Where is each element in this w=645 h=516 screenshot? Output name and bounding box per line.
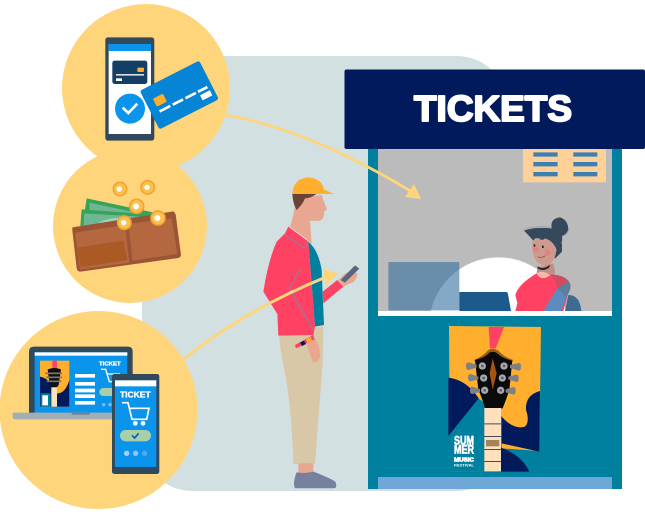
booth body <box>368 140 622 489</box>
jacket <box>263 227 315 336</box>
laptop <box>13 347 133 419</box>
phone <box>105 37 154 141</box>
forearm <box>323 280 343 303</box>
transparent screen <box>388 262 459 310</box>
wristband <box>295 335 314 348</box>
trousers <box>279 326 323 464</box>
heading: tickets: TICKETS <box>414 88 572 129</box>
icon: wallet with coins <box>72 181 181 272</box>
ticket seller and desk <box>388 217 582 311</box>
lower hand <box>305 336 320 362</box>
cap <box>292 177 334 194</box>
poster title: FESTIVAL <box>454 463 474 467</box>
booth window <box>378 149 612 311</box>
menu sign <box>523 148 606 182</box>
phone hand <box>338 272 357 287</box>
mini poster <box>40 361 69 407</box>
check badge <box>115 94 145 124</box>
ticket booth <box>344 70 645 489</box>
booth roof sign <box>344 70 645 149</box>
wallet <box>72 211 181 272</box>
poster title <box>454 435 474 467</box>
shoe <box>294 472 336 488</box>
white back shape <box>430 257 566 311</box>
smartphone <box>112 374 159 474</box>
pink strap <box>489 327 504 348</box>
window sill <box>378 311 612 316</box>
laptop: TICKET <box>99 362 121 368</box>
seller's monitor <box>459 292 511 311</box>
head and neck <box>290 195 327 243</box>
poster title: SUM <box>454 435 474 448</box>
banknotes <box>80 198 173 239</box>
background panel <box>142 56 507 491</box>
arrow: card payment to booth <box>226 115 421 199</box>
arrow: online tickets to person <box>184 269 338 359</box>
circle: cash wallet <box>53 149 207 303</box>
phone <box>341 265 359 283</box>
festival poster <box>448 326 541 472</box>
guitar neck <box>484 408 501 471</box>
inner shirt <box>308 242 324 327</box>
circle: card payment <box>62 4 230 172</box>
coins <box>113 181 165 229</box>
seller <box>515 217 581 311</box>
poster title: MUSIC <box>454 457 474 463</box>
cart <box>122 403 149 426</box>
icon: phone with card <box>105 37 219 141</box>
card on screen <box>112 61 147 84</box>
poster base <box>449 326 541 472</box>
icon: laptop and phone ticket shop <box>13 347 159 474</box>
smartphone: TICKET <box>120 390 151 400</box>
navy waves <box>448 378 479 436</box>
credit card <box>140 61 219 129</box>
poster title: MER <box>454 443 474 456</box>
ankle <box>298 463 313 474</box>
hair <box>292 193 317 210</box>
confirm button <box>120 430 151 441</box>
circle: online tickets <box>0 311 198 509</box>
person with phone <box>263 177 359 488</box>
guitar headstock <box>466 349 521 408</box>
bottom strip <box>378 477 612 489</box>
